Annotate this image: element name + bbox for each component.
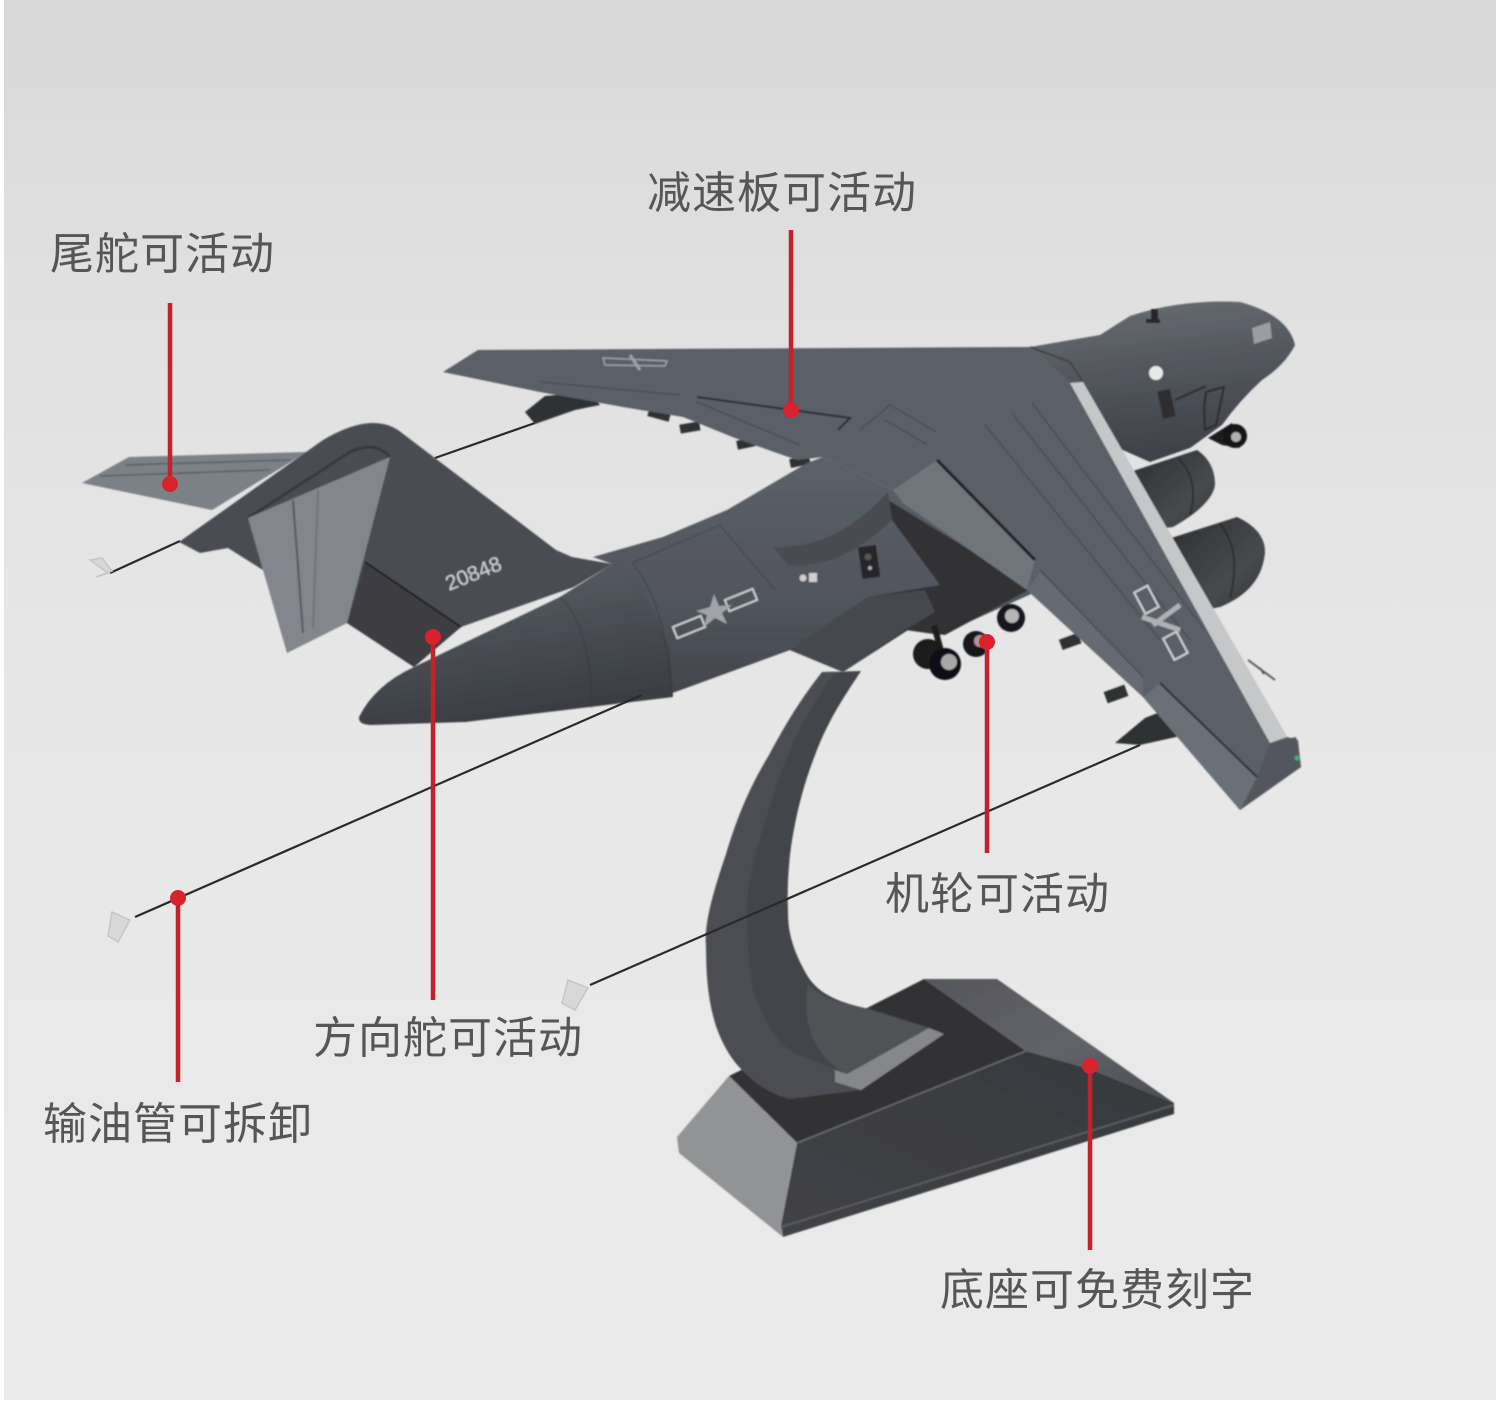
nose wheel — [1208, 423, 1247, 448]
inner flap — [893, 460, 1035, 590]
far fuel pipe wire — [435, 423, 535, 458]
far wing — [443, 347, 1070, 490]
fuselage underwing shadow — [790, 500, 1032, 672]
wing roundel — [1134, 586, 1188, 660]
aileron — [1143, 683, 1257, 810]
display stand — [677, 671, 1174, 1237]
callout: 机轮可活动 — [885, 634, 1110, 919]
callout: 底座可免费刻字: 底座可免费刻字 — [940, 1266, 1255, 1315]
callout: 尾舵可活动 — [50, 230, 275, 492]
outer flap — [1027, 572, 1143, 697]
callout: 尾舵可活动: 尾舵可活动 — [50, 230, 275, 279]
far wing pods — [525, 392, 811, 468]
near wing — [893, 347, 1301, 810]
stand arc — [706, 671, 944, 1099]
panel lines — [985, 403, 1205, 677]
tail cone — [359, 563, 673, 725]
suction cups — [90, 558, 588, 1010]
tail number: 20848 — [442, 552, 505, 596]
wing light — [1248, 660, 1275, 680]
stand base — [677, 979, 1174, 1237]
model aircraft — [82, 302, 1301, 810]
engines — [1130, 450, 1265, 610]
callout: 底座可免费刻字 — [940, 1058, 1255, 1315]
far tailplane — [82, 452, 307, 510]
vertical fin — [179, 423, 612, 667]
callout: 机轮可活动: 机轮可活动 — [885, 870, 1110, 919]
rudder — [248, 457, 390, 653]
nose — [1030, 302, 1295, 462]
fuselage door and windows — [800, 545, 880, 582]
fuselage roundel — [673, 589, 757, 638]
wing fairing shadow — [773, 492, 892, 565]
fuel pipe wires — [110, 541, 1140, 985]
callout: 减速板可活动 — [647, 169, 917, 418]
leading edge strip — [1070, 382, 1287, 743]
fuselage — [465, 457, 1040, 722]
callout: 输油管可拆卸 — [43, 890, 313, 1149]
near wing pods — [1059, 633, 1185, 745]
callout: 输油管可拆卸: 输油管可拆卸 — [43, 1100, 313, 1149]
callout: 方向舵可活动: 方向舵可活动 — [313, 1014, 583, 1063]
fuselage lower fairing — [790, 590, 935, 672]
callout: 减速板可活动: 减速板可活动 — [647, 169, 917, 218]
main landing gear wheels — [913, 604, 1025, 680]
callout: 方向舵可活动 — [313, 629, 583, 1063]
wing tip — [1240, 737, 1301, 810]
